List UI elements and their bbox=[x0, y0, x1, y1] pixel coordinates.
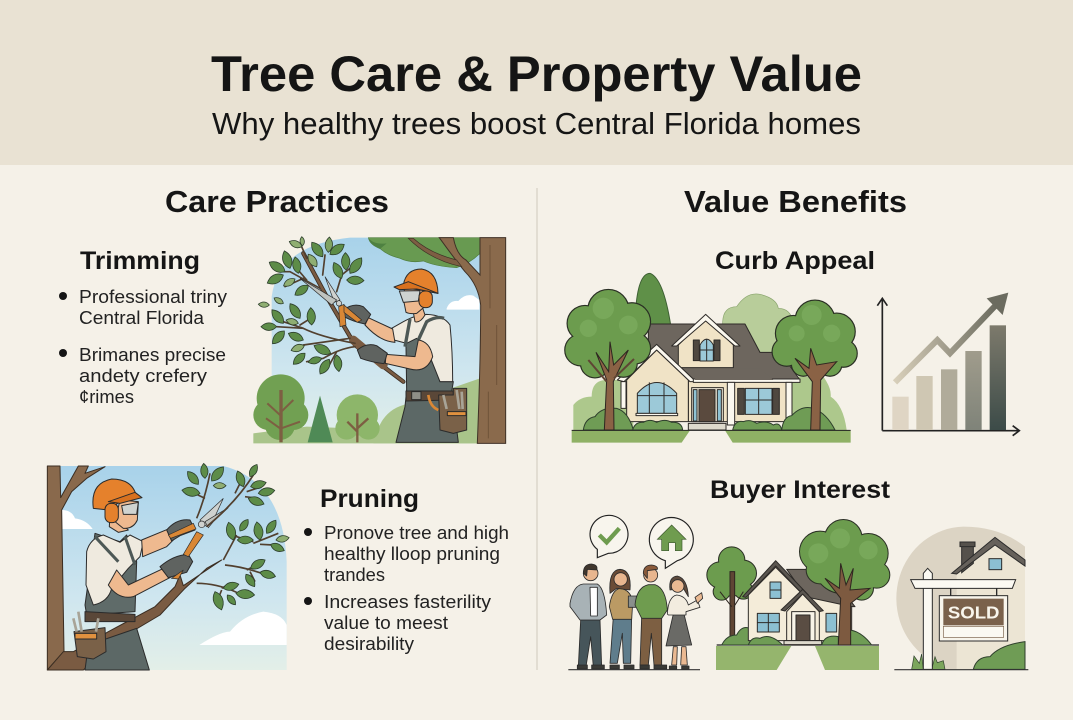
heading: Care Practices: Care Practices bbox=[165, 184, 389, 219]
bullet one: Central Florida bbox=[79, 308, 205, 328]
illustration: buyers, house, sold sign bbox=[568, 515, 1028, 670]
heading: Buyer Interest: Buyer Interest bbox=[710, 476, 891, 504]
middle house bbox=[707, 520, 889, 670]
bullet one bbox=[79, 287, 227, 328]
worker bbox=[73, 479, 195, 670]
bullet one: Professional triny bbox=[79, 287, 227, 307]
leaves bbox=[181, 463, 290, 611]
title: Tree Care & Property Value bbox=[211, 46, 862, 102]
branches bbox=[277, 247, 403, 382]
bullet two: value to meest bbox=[324, 613, 448, 633]
shrubs bbox=[583, 408, 835, 430]
bullet one: Pronove tree and high bbox=[324, 523, 509, 543]
illustration: worker pruning tree bbox=[47, 463, 290, 670]
bullet two: andety crefery bbox=[79, 366, 207, 386]
bullet one: healthy lloop pruning bbox=[324, 544, 500, 564]
bullet two: desirability bbox=[324, 634, 414, 654]
speech bubble: house bbox=[649, 518, 693, 568]
bullet two bbox=[79, 345, 226, 407]
bullet two: Brimanes precise bbox=[79, 345, 226, 365]
heading: Pruning: Pruning bbox=[320, 485, 419, 513]
illustration: worker trimming tree bbox=[253, 236, 506, 443]
trunk and branch bbox=[47, 466, 222, 670]
heading: Curb Appeal: Curb Appeal bbox=[715, 247, 875, 275]
panel: trimming text bbox=[59, 247, 227, 407]
bullet one bbox=[324, 523, 509, 585]
bullet two: ¢rimes bbox=[79, 387, 134, 407]
illustration: house with trees bbox=[565, 273, 857, 443]
speech bubble: check bbox=[590, 515, 628, 558]
right tree bbox=[773, 301, 857, 376]
lawn bbox=[572, 430, 851, 443]
shears bbox=[300, 277, 362, 327]
people bbox=[570, 564, 703, 669]
left tree bbox=[565, 290, 650, 377]
heading: Trimming: Trimming bbox=[80, 247, 200, 275]
leaves bbox=[258, 236, 365, 376]
sold sign scene bbox=[896, 527, 1025, 669]
bullet two: Increases fasterility bbox=[324, 592, 491, 612]
bar chart with rising arrow bbox=[877, 293, 1019, 436]
twigs bbox=[197, 473, 278, 598]
heading: Value Benefits: Value Benefits bbox=[684, 184, 907, 219]
loppers bbox=[168, 498, 228, 579]
bullet two bbox=[324, 592, 491, 654]
worker bbox=[343, 269, 467, 442]
house body bbox=[617, 314, 800, 430]
subtitle: Why healthy trees boost Central Florida homes bbox=[212, 106, 861, 141]
bullet one: trandes bbox=[324, 565, 385, 585]
header band bbox=[0, 0, 1073, 165]
sold label: SOLD bbox=[948, 603, 999, 623]
panel: pruning text bbox=[304, 485, 509, 654]
